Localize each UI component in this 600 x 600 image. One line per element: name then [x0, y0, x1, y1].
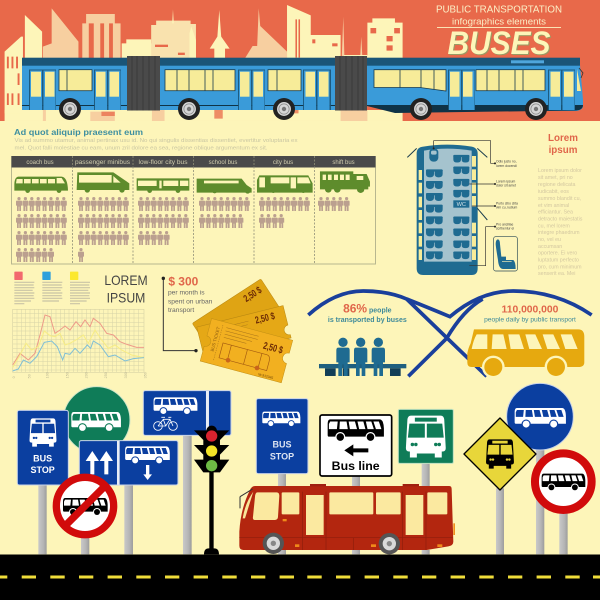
- sign: bus line: Bus line: [332, 459, 380, 473]
- intro text: mel. Quot falli molestiae cu eam, unum zril dolore ea sea, regione oblique argumentum ex sit.: [14, 146, 268, 152]
- sign: green bus front: [398, 409, 453, 463]
- intro text: [14, 138, 298, 152]
- right text column: Lorem ipsum dolor: [538, 168, 582, 174]
- right text column: cu, mel lorem: [538, 223, 570, 229]
- people pictograms: [16, 197, 350, 262]
- sign: blue circle bus: [507, 383, 573, 450]
- table headers: [26, 160, 355, 166]
- $300 callout: spent on urban: [168, 298, 213, 305]
- right text column: regione delicata: [538, 182, 575, 188]
- lorem ipsum heading: [548, 133, 578, 156]
- bus floor plan: Purto cibo clita: [496, 201, 518, 205]
- sign: bus stop 2: BUS: [272, 440, 291, 450]
- stat: 110,000,000: people daily by public transport: [484, 316, 576, 323]
- poles: [278, 448, 568, 554]
- callouts: [434, 141, 495, 266]
- seat icon: [494, 237, 517, 271]
- title text: BUSES: [448, 26, 552, 62]
- table headers: coach bus: [26, 160, 54, 166]
- arches: [308, 291, 592, 376]
- title text: [436, 4, 562, 62]
- sign: bus stop 2: STOP: [270, 451, 294, 461]
- bus floor plan: vim cu, iudium: [496, 206, 517, 210]
- line chart: 50: [27, 374, 31, 378]
- right text column: summo blandit cu,: [538, 196, 581, 202]
- stat: 86%: is transported by buses: [328, 317, 407, 324]
- people on bench: [319, 338, 406, 376]
- sign: red circle bus: [535, 453, 592, 510]
- right text column: accumsan: [538, 244, 562, 250]
- bus floor plan: WC: [457, 202, 466, 208]
- right text column: efficiantur. Sea: [538, 210, 573, 216]
- $300 callout: per month is: [168, 290, 205, 297]
- bus floor plan: dolor sit amet: [496, 184, 516, 188]
- right text column: luptatum perfecto: [538, 258, 579, 264]
- header banner: [0, 0, 600, 121]
- line chart: 0: [12, 376, 16, 378]
- road signs left: [17, 387, 308, 554]
- table headers: school bus: [209, 160, 237, 166]
- lorem ipsum heading: ipsum: [549, 145, 578, 156]
- line chart: 200: [85, 372, 89, 378]
- line chart: [12, 309, 147, 378]
- sign: bus stop: BUS: [33, 454, 52, 464]
- bus floor plan: Lorem ipsum: [496, 179, 515, 183]
- stat: 86%: [328, 302, 407, 324]
- line chart: 250: [104, 372, 108, 378]
- right text column: [538, 168, 583, 277]
- articulated blue bus: [22, 56, 583, 120]
- heading: Ad quot: Ad quot aliquip praesent eum: [14, 127, 143, 137]
- LOREM IPSUM heading: LOREM: [104, 273, 148, 288]
- right text column: no, vel eu: [538, 237, 561, 243]
- stat: 86%: 86% people: [343, 302, 392, 316]
- $300 callout: [162, 275, 213, 352]
- right text column: pro, cum minimum: [538, 264, 582, 270]
- line chart: 100: [46, 372, 50, 378]
- LOREM IPSUM heading: IPSUM: [107, 290, 145, 305]
- title text: infographics elements: [452, 16, 546, 28]
- legend swatches: [14, 272, 90, 304]
- road: [0, 554, 600, 600]
- bus floor plan: Odio justo no,: [496, 160, 517, 164]
- right text column: iudicabit, eos: [538, 189, 569, 195]
- tickets: 2,50 $: [262, 341, 284, 357]
- right text column: sit amet, pri no: [538, 175, 573, 181]
- table headers: passenger minibus: [75, 160, 130, 166]
- sign: bus and bicycle: [143, 391, 231, 435]
- table headers: low-floor city bus: [138, 160, 188, 166]
- bus floor plan: scribentur ei: [496, 227, 514, 231]
- road signs right: [239, 383, 592, 554]
- sign: no buses: [56, 477, 114, 535]
- intro text: Vis ad summo utamur, animal pertinax usu id. No qui singulis dissentias dissentiet, evertitur voluptaria ex: [14, 138, 298, 144]
- tickets: 2,50 $: [242, 285, 264, 305]
- right text column: detracto maiestatis: [538, 216, 583, 222]
- tickets: [192, 279, 293, 383]
- stat: 110,000,000: 110,000,000: [502, 305, 559, 316]
- $300 callout: transport: [168, 307, 194, 314]
- right text column: oportere. Ei vero: [538, 251, 577, 257]
- right text column: senserit ea. Mei: [538, 271, 575, 277]
- city skyline: [5, 5, 403, 121]
- title text: PUBLIC TRANSPORTATION: [436, 4, 562, 16]
- bus floor plan: [407, 141, 518, 275]
- chart panel: [12, 272, 293, 383]
- sign: bus line: [320, 415, 392, 476]
- LOREM IPSUM heading: [104, 273, 148, 305]
- sign: lanes: [79, 441, 178, 485]
- bus floor plan: lorem docendi: [496, 164, 517, 168]
- line chart: 150: [66, 372, 70, 378]
- poles: [38, 434, 286, 554]
- title text: BUSES: [448, 25, 551, 61]
- sign: bus stop 2: [256, 399, 308, 474]
- tickets: BUS TICKET: [210, 326, 221, 352]
- sign: bus stop: [17, 410, 68, 485]
- bus floor plan: Pro ancillae: [496, 222, 514, 226]
- line chart: 300: [124, 372, 128, 378]
- yellow bus: [467, 329, 584, 378]
- right text column: et vim animal: [538, 203, 569, 209]
- lorem ipsum heading: Lorem: [548, 133, 578, 144]
- tickets: № 912345: [258, 372, 274, 380]
- red bus: [239, 484, 455, 554]
- stat: 110,000,000: [484, 305, 576, 323]
- statistics arches panel: [308, 291, 592, 378]
- tickets: 2,50 $: [254, 311, 276, 327]
- sign: yellow diamond: [464, 418, 536, 490]
- green bus icons: [14, 171, 370, 194]
- panel: bus types table: [12, 156, 376, 264]
- right text column: integre phaedrum: [538, 230, 580, 236]
- sign: green circle bus: [63, 387, 130, 453]
- traffic light: [194, 426, 229, 554]
- table headers: shift bus: [332, 160, 355, 166]
- line chart: 350: [143, 372, 147, 378]
- table headers: city bus: [273, 160, 293, 166]
- sign: bus stop: STOP: [31, 465, 55, 475]
- $300 callout: $ 300: [168, 275, 199, 289]
